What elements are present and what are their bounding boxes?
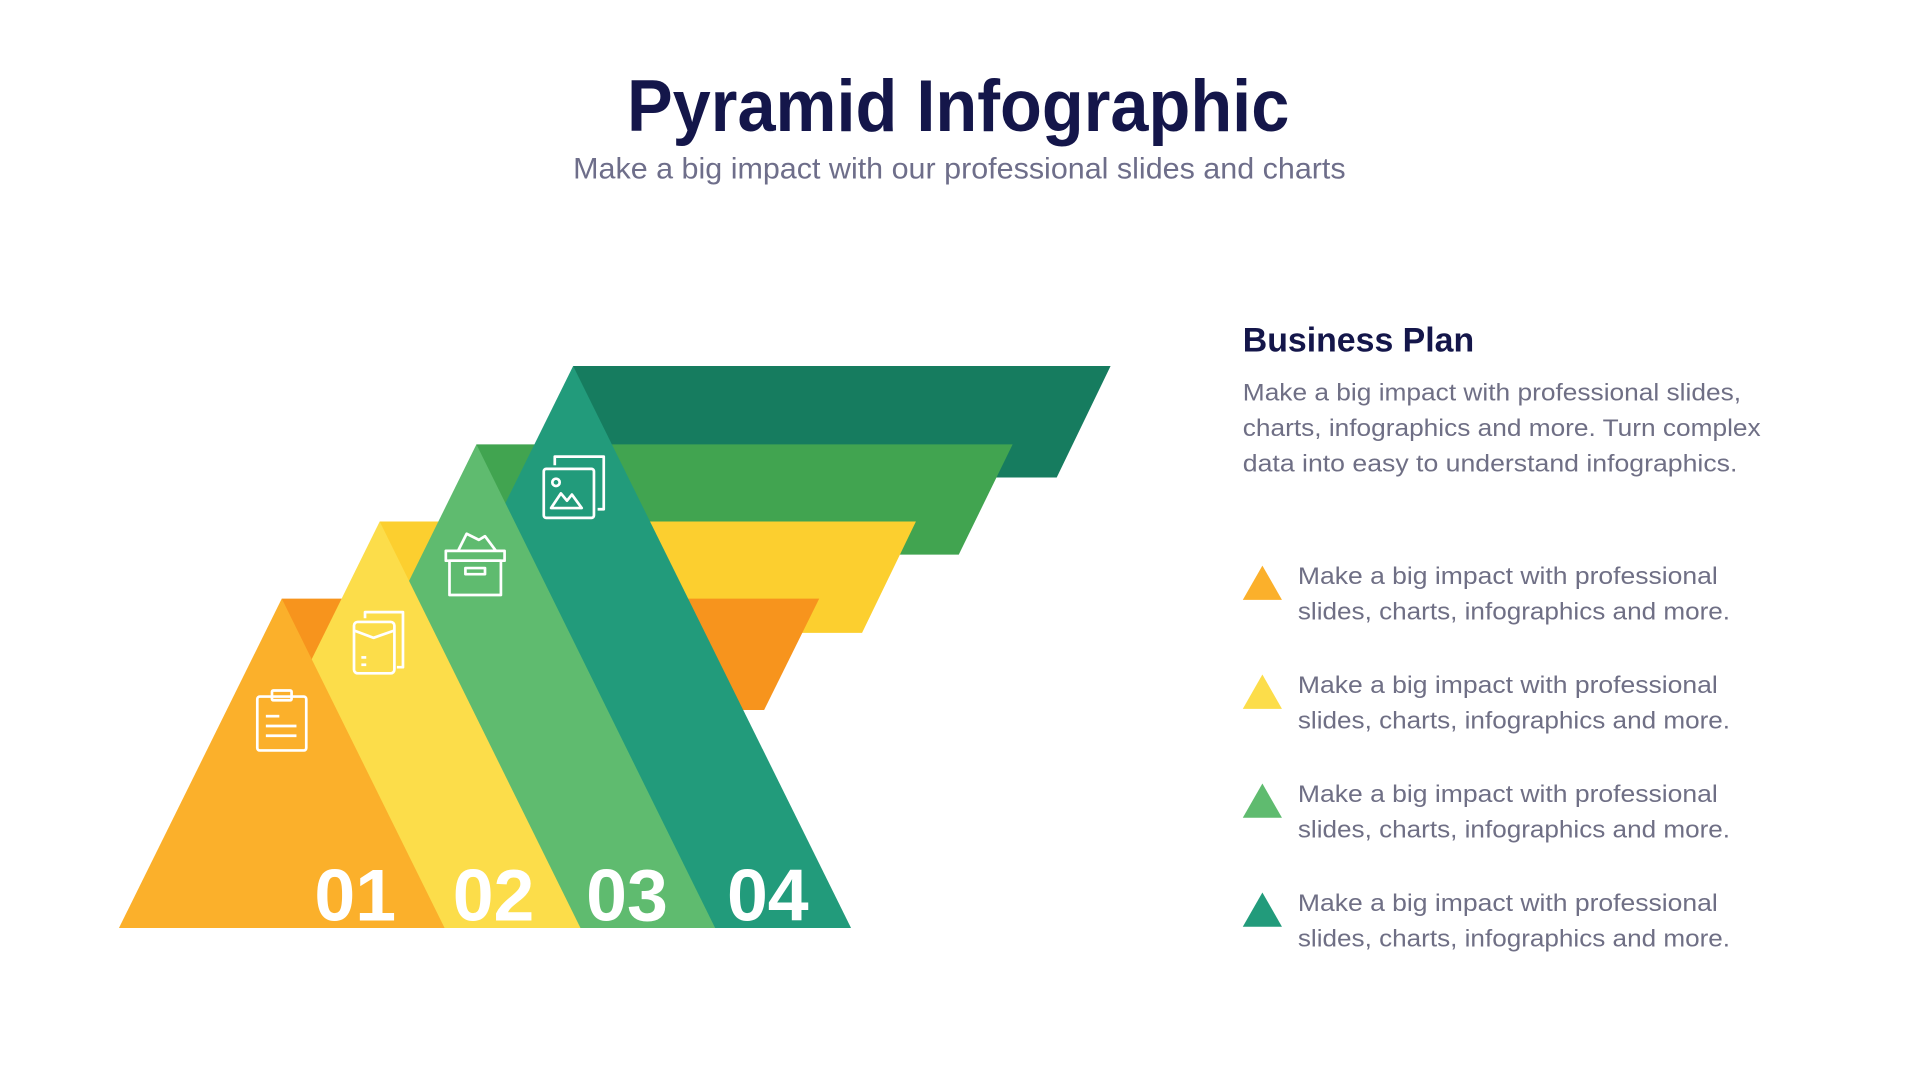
band 1: [282, 599, 819, 710]
icon: phones: [354, 612, 403, 673]
legend item 2: Make a big impact with professional: [1298, 672, 1718, 699]
legend item 1: [1243, 563, 1730, 625]
icon: clipboard: [257, 690, 306, 750]
icon: box: [446, 534, 505, 595]
paragraph: Make a big impact with professional slides,: [1243, 379, 1741, 406]
legend item 3: slides, charts, infographics and more.: [1298, 816, 1730, 843]
number labels: 02: [453, 855, 534, 937]
legend item 3: [1243, 781, 1730, 843]
title: Pyramid Infographic: [627, 65, 1289, 147]
triangle 1: [119, 599, 445, 928]
subtitle: Make a big impact with our professional slides and charts: [573, 153, 1346, 186]
legend item 2: [1243, 672, 1730, 734]
legend item 4: Make a big impact with professional: [1298, 890, 1718, 917]
legend item 2: slides, charts, infographics and more.: [1298, 707, 1730, 734]
paragraph: [1243, 379, 1761, 477]
legend item 4: [1243, 890, 1730, 952]
legend item 1: slides, charts, infographics and more.: [1298, 598, 1730, 625]
band 2: [380, 522, 916, 633]
paragraph: charts, infographics and more. Turn complex: [1243, 415, 1761, 442]
triangle 4: [295, 366, 851, 928]
number labels: [314, 855, 809, 937]
legend item 3: Make a big impact with professional: [1298, 781, 1718, 808]
triangle 3: [238, 444, 715, 928]
band 3: [476, 444, 1013, 555]
number labels: 04: [727, 855, 809, 937]
legend item 1: Make a big impact with professional: [1298, 563, 1718, 590]
heading: business plan: Business Plan: [1243, 321, 1474, 359]
paragraph: data into easy to understand infographics.: [1243, 450, 1737, 477]
triangle 2: [179, 522, 580, 928]
legend item 4: slides, charts, infographics and more.: [1298, 925, 1730, 952]
band 4: [573, 366, 1111, 477]
pyramid chart: [119, 366, 1111, 937]
icon: image: [544, 457, 604, 518]
number labels: 01: [314, 855, 396, 937]
number labels: 03: [586, 855, 668, 937]
legend: [1243, 563, 1730, 952]
